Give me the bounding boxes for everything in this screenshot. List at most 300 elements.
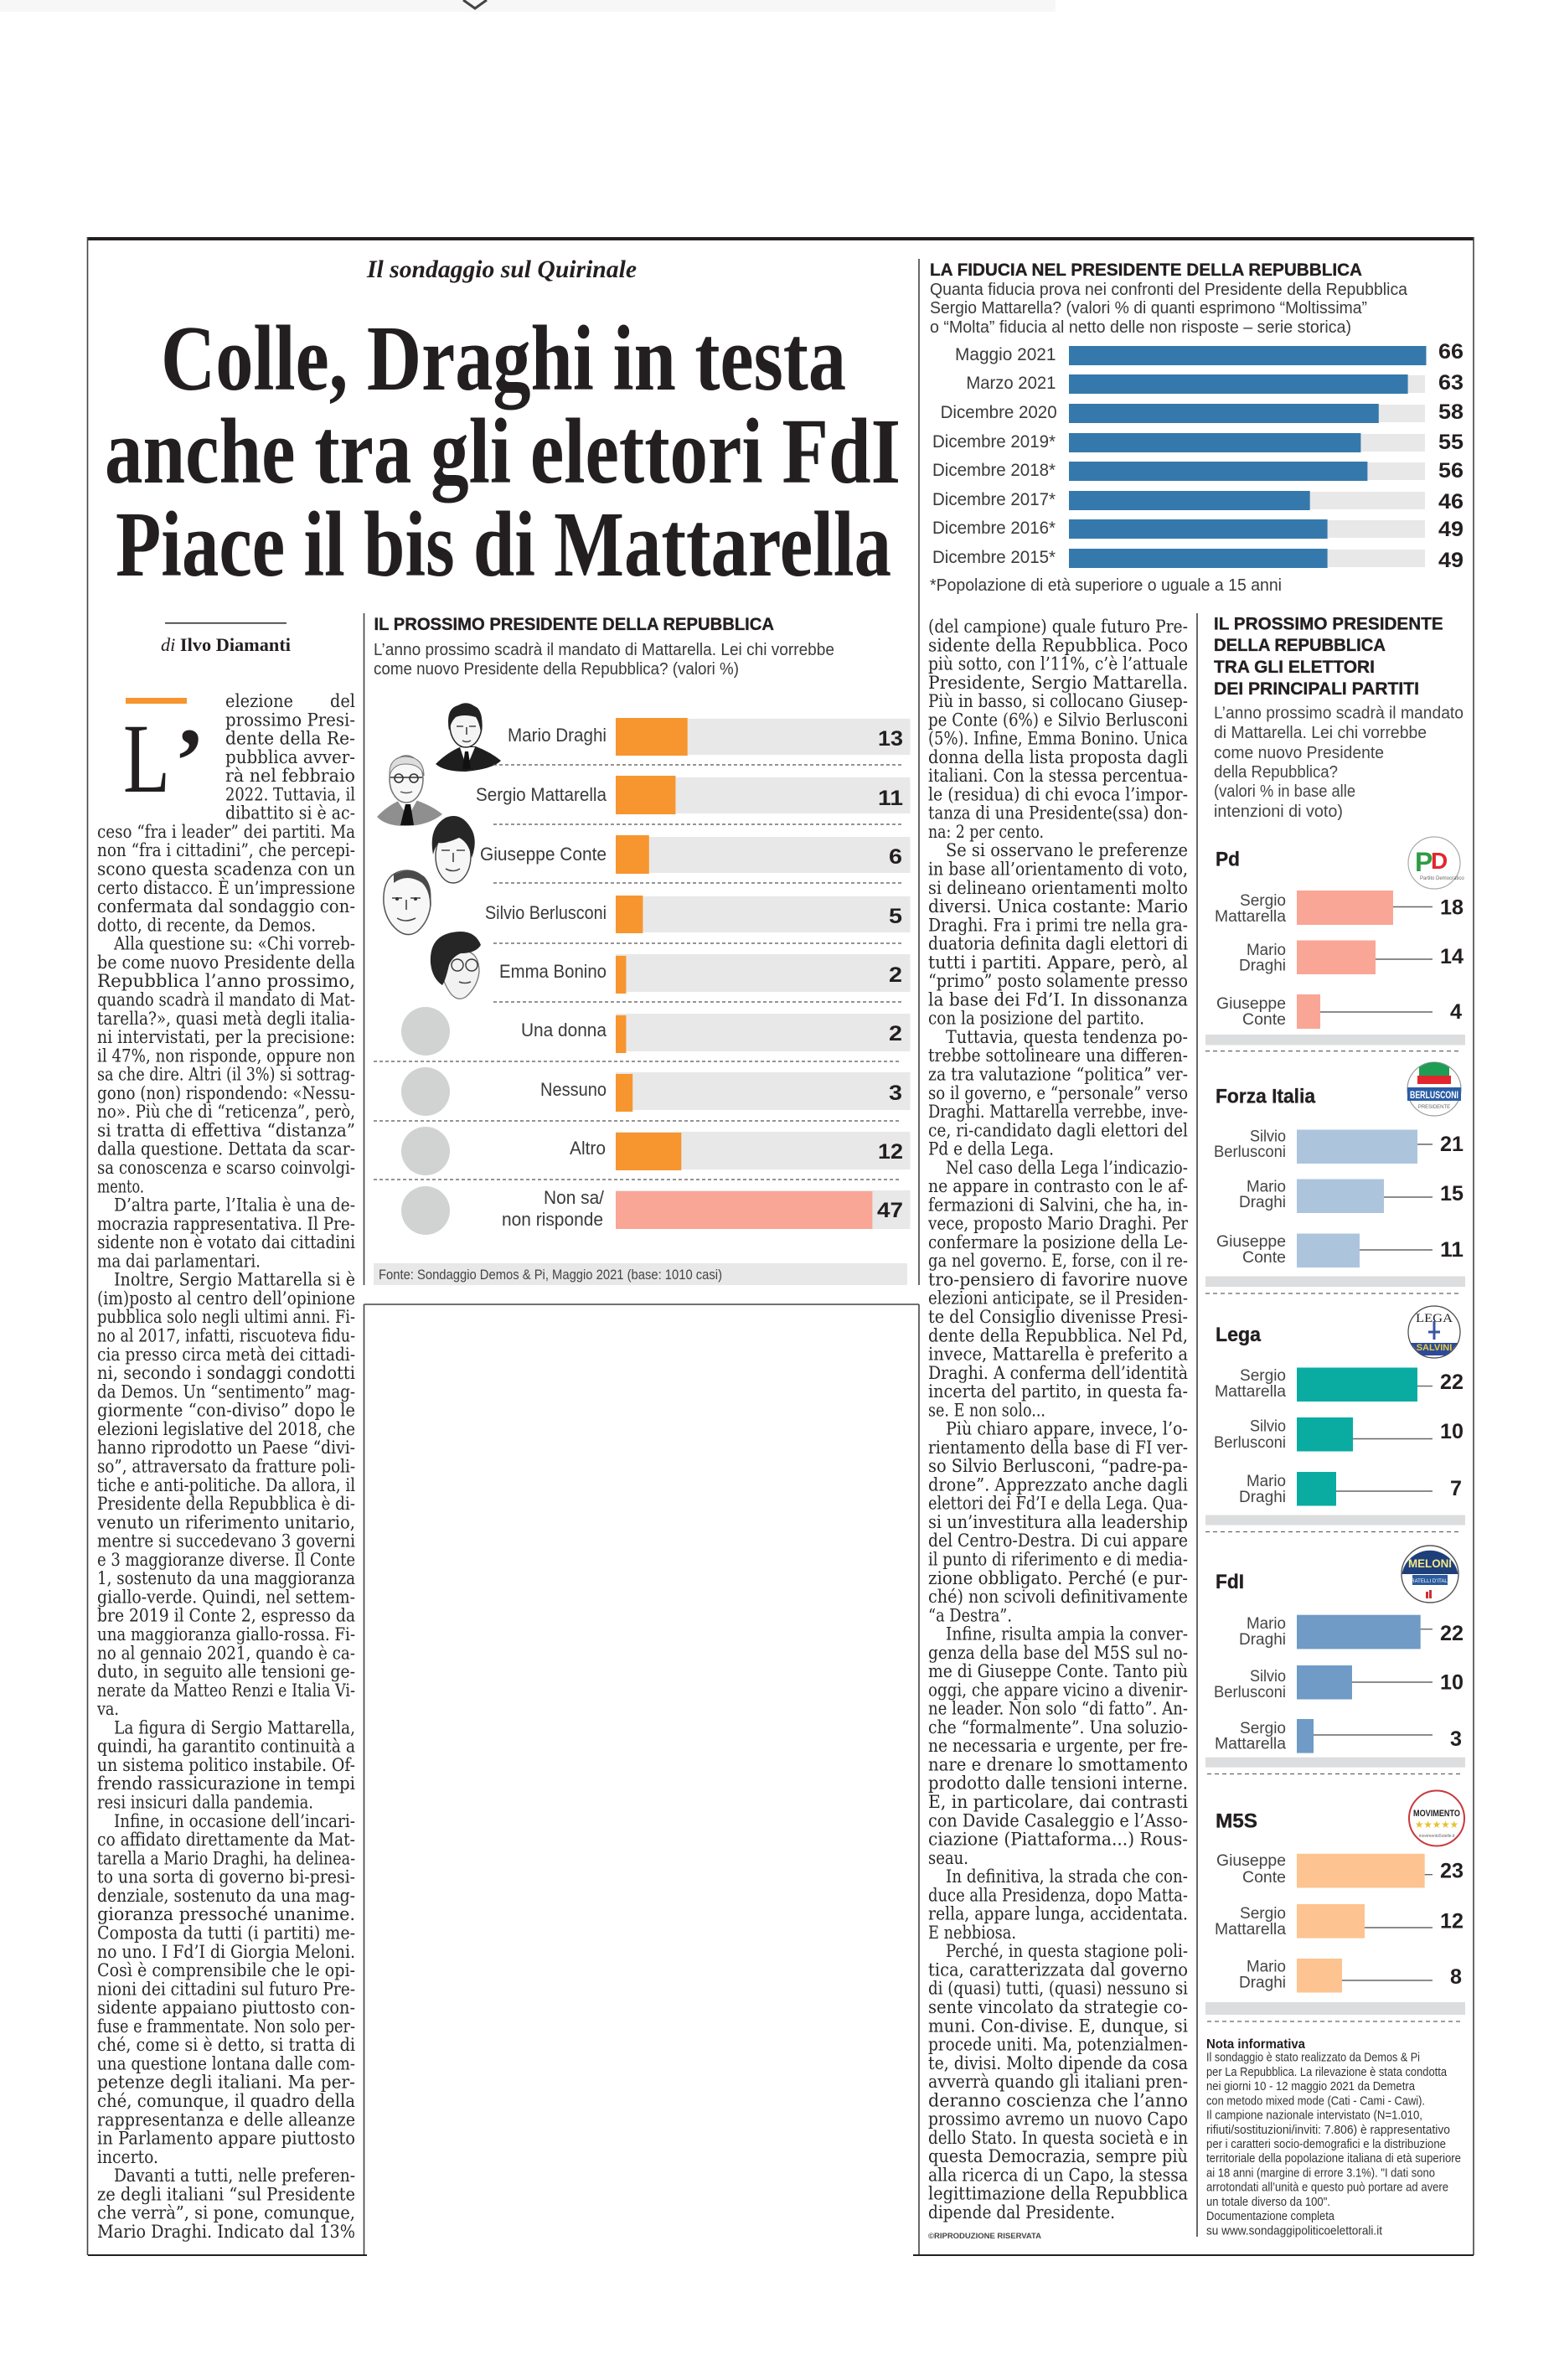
- section: Pd: 18: [1440, 896, 1463, 920]
- article text: column 2: tutti i partiti. Appare, però, al: [928, 953, 1188, 973]
- article text: column 2: più sotto, con l’11%, c’è l’attuale: [928, 653, 1188, 675]
- article text: column 1: (im)posto al centro dell’opinione: [97, 1288, 355, 1309]
- article text: column 1: quando scadrà il mandato di Mat-: [97, 990, 355, 1010]
- icon: logo FdI: FRATELLI D’ITALIA: [1408, 1579, 1452, 1584]
- nota informativa: Nota informativa: [1206, 2037, 1305, 2052]
- bar chart: fiducia: 63: [1438, 371, 1463, 395]
- nota informativa: Il sondaggio è stato realizzato da Demos & Pi: [1206, 2051, 1420, 2065]
- drop cap: ’: [174, 710, 205, 812]
- section: Lega: 7: [1450, 1477, 1462, 1500]
- section: Forza Italia: Giuseppe: [1216, 1233, 1286, 1251]
- section: Forza Italia: 11: [1440, 1238, 1463, 1262]
- article text: column 2: pe Conte (6%) e Silvio Berlusconi: [928, 710, 1188, 731]
- article text: column 1: petenze degli italiani. Ma per-: [97, 2073, 355, 2093]
- bar chart: fiducia: Dicembre 2018*: [932, 461, 1056, 480]
- article text: column 1: no al 2017, infatti, riscuoteva fidu-: [97, 1325, 355, 1347]
- bar chart: fiducia: Dicembre 2016*: [932, 519, 1056, 538]
- article text: column 1: Repubblica l’anno prossimo,: [97, 971, 355, 992]
- bar chart: candidati: 12: [878, 1140, 903, 1164]
- article text: column 1: Infine, in occasione dell’incari-: [114, 1811, 355, 1832]
- article text: column 2: drone”. Apprezzato anche dagli: [928, 1474, 1188, 1495]
- article text: column 2: prossimo avremo un nuovo Capo: [928, 2109, 1188, 2130]
- article text: column 1: e 3 maggioranze diverse. Il Conte: [97, 1550, 355, 1571]
- article text: column 2: rientamento della base di FI ver-: [928, 1438, 1188, 1458]
- article text: column 1: ché, comunque, il quadro della: [97, 2091, 355, 2112]
- article text: column 1: frendo rassicurazione in tempi: [97, 1773, 355, 1794]
- article text: column 1: mocrazia rappresentativa. Il Pre-: [97, 1214, 355, 1235]
- article text: column 2: sente vincolato da strategie co-: [928, 1997, 1188, 2018]
- section: Forza Italia: Silvio: [1250, 1128, 1286, 1146]
- article text: column 1: mentre si succedevano 3 governi: [97, 1531, 355, 1552]
- bar chart: fiducia: Dicembre 2019*: [932, 432, 1056, 452]
- bar chart: fiducia: Dicembre 2015*: [932, 548, 1056, 567]
- article text: column 2: “a Destra”.: [928, 1605, 1012, 1626]
- nota informativa: [1206, 2037, 1461, 2238]
- article text: column 1: rappresentanza e delle alleanze: [97, 2109, 355, 2130]
- article text: column 2: se. E non solo...: [928, 1400, 1045, 1421]
- article text: column 2: il punto di riferimento e di media-: [928, 1550, 1188, 1570]
- bar chart: fiducia: Dicembre 2017*: [932, 490, 1056, 509]
- section: FdI: Mattarella: [1215, 1736, 1286, 1753]
- heading: LA FIDUCIA NEL PRESIDENTE DELLA REPUBBLICA: [930, 261, 1362, 280]
- article text: column 2: ne necessaria e urgente, per fre-: [928, 1736, 1188, 1757]
- article text: column 2: fermazioni di Salvini, che ha, in-: [928, 1195, 1188, 1216]
- article text: column 1: no». Più che di “reticenza”, però,: [97, 1102, 355, 1123]
- bar chart: candidati: Nessuno: [540, 1079, 607, 1100]
- icon: logo M5S: ★★★★★: [1415, 1819, 1458, 1830]
- article text: column 2: questa Democrazia, sempre più: [928, 2146, 1188, 2167]
- article text: column 1: elezione: [225, 691, 293, 712]
- section: Pd: Sergio: [1240, 892, 1286, 910]
- nota informativa: su www.sondaggipoliticoelettorali.it: [1206, 2223, 1383, 2238]
- icon: logo Pd: P: [1415, 847, 1433, 877]
- section: Forza Italia: [1205, 1062, 1465, 1287]
- subtitle: di Mattarella. Lei chi vorrebbe: [1214, 724, 1427, 742]
- article text: column 1: elezioni legislative del 2018, che: [97, 1419, 355, 1440]
- panel: prossimo presidente: [374, 615, 910, 1285]
- bar chart: fiducia: 46: [1438, 490, 1463, 514]
- article text: column 1: mento.: [97, 1176, 144, 1197]
- section: Lega: 22: [1440, 1371, 1463, 1394]
- section: Pd: Giuseppe: [1216, 995, 1286, 1013]
- article text: column 1: il 47%, non risponde, oppure non: [97, 1045, 355, 1066]
- article text: column 2: legittimazione della Repubblica: [928, 2184, 1188, 2205]
- article text: column 1: che verrà”, si pone, comunque,: [97, 2203, 355, 2224]
- article text: column 1: dalla questione. Dettata da scar-: [97, 1139, 355, 1160]
- article text: column 2: (del campione) quale futuro Pre-: [928, 617, 1188, 638]
- article text: column 2: Presidente, Sergio Mattarella.: [928, 673, 1188, 694]
- article text: column 2: Se si osservano le preferenze: [946, 840, 1188, 861]
- section: Lega: Sergio: [1240, 1367, 1286, 1385]
- icon: placeholder circles: [401, 1007, 450, 1235]
- bar chart: candidati: 2: [889, 1022, 902, 1045]
- article text: column 1: venuto un riferimento unitario,: [96, 1512, 355, 1533]
- article text: column 2: (5%). Infine, Emma Bonino. Unica: [928, 729, 1188, 750]
- article text: column 2: rella, appare lunga, accidentata.: [928, 1904, 1188, 1925]
- article text: column 2: za tra valutazione “politica” ver-: [928, 1064, 1188, 1086]
- nota informativa: Documentazione completa: [1206, 2209, 1335, 2223]
- article text: column 1: to una sorta di governo bi-presi-: [97, 1867, 355, 1888]
- article text: column 2: Draghi. Fra i primi tre nella gra-: [928, 915, 1188, 936]
- article text: column 2: trebbe sottolineare una differen-: [928, 1045, 1188, 1066]
- article text: column 2: dente della Repubblica. Nel Pd,: [928, 1325, 1188, 1346]
- article text: column 1: duto, in seguito alle tensioni ge-: [97, 1662, 355, 1683]
- icon: logo Lega: SALVINI: [1417, 1343, 1452, 1353]
- article text: column 2: zione obbligato. Perché (e pur-: [928, 1568, 1188, 1589]
- bar chart: fiducia: 49: [1438, 518, 1463, 541]
- bar chart: fiducia: Marzo 2021: [966, 374, 1056, 393]
- section: FdI: Draghi: [1239, 1631, 1286, 1649]
- article text: column 2: ne leader. Non solo “di fatto”. An-: [928, 1699, 1188, 1720]
- heading: DELLA REPUBBLICA: [1214, 636, 1386, 655]
- section: M5S: M5S: [1216, 1810, 1257, 1833]
- copyright note: ©RIPRODUZIONE RISERVATA: [928, 2232, 1042, 2240]
- section: Lega: 10: [1440, 1420, 1463, 1443]
- article text: column 1: giormente “con-diviso” dopo le: [97, 1401, 355, 1422]
- article text: column 1: quindi, ha garantito continuità a: [97, 1737, 355, 1758]
- article text: column 1: ceso “fra i leader” dei partiti. Ma: [97, 822, 355, 843]
- article text: column 2: ché) non scivoli definitivamente: [928, 1587, 1188, 1608]
- article text: column 1: si tratta di effettiva “distanza”: [97, 1120, 355, 1141]
- article text: column 2: Draghi. Mattarella verrebbe, inve-: [928, 1102, 1188, 1123]
- article text: column 2: Tuttavia, questa tendenza po-: [946, 1027, 1188, 1048]
- article text: column 1: un sistema politico instabile. Of-: [97, 1755, 355, 1776]
- nota informativa: Il campione nazionale intervistato (N=1.010,: [1206, 2109, 1422, 2123]
- article text: column 1: del: [330, 691, 355, 712]
- article text: column 1: prossimo Presi-: [225, 710, 355, 731]
- article text: column 2: ciazione (Piattaforma...) Rous-: [928, 1830, 1188, 1851]
- article text: column 2: confermare la posizione della Le-: [928, 1232, 1188, 1253]
- section: Forza Italia: Conte: [1242, 1249, 1286, 1267]
- bar chart: fiducia: 49: [1438, 549, 1463, 572]
- bar chart: candidati: 2: [889, 963, 902, 987]
- icon: logo Forza Italia: [1407, 1062, 1461, 1116]
- section: Forza Italia: Berlusconi: [1214, 1144, 1286, 1161]
- nota informativa: rifiuti/sostituzioni/inviti: 7.806) è rappresentativo: [1206, 2123, 1450, 2137]
- bar chart: candidati: Emma Bonino: [499, 961, 607, 982]
- nota informativa: ai 18 anni (margine di errore 3.1%). "I dati sono: [1206, 2166, 1435, 2180]
- subtitle: della Repubblica?: [1214, 763, 1338, 782]
- icon: logo Lega: LEGA: [1416, 1312, 1453, 1325]
- article text: column 2: la base dei Fd’I. In dissonanza: [928, 989, 1188, 1010]
- article text: column 2: di (quasi) tutti, (quasi) nessuno si: [928, 1979, 1188, 2000]
- section: Forza Italia: 15: [1440, 1182, 1463, 1205]
- article text: column 1: Presidente della Repubblica è di-: [97, 1494, 355, 1515]
- article text: column 1: hanno riprodotto un Paese “divi-: [97, 1438, 355, 1458]
- article text: column 1: sa conoscenza e scarso coinvolgi-: [97, 1158, 355, 1179]
- section: Pd: 14: [1440, 945, 1463, 968]
- article text: column 1: resi insicuri dalla pandemia.: [97, 1793, 313, 1813]
- article text: column 1: confermata dal sondaggio con-: [97, 896, 355, 917]
- article text: column 1: cia presso circa metà dei cittadi-: [97, 1345, 355, 1366]
- article text: column 1: pubblica avver-: [225, 747, 355, 768]
- article text: column 2: Draghi. A conferma dell’identità: [928, 1363, 1188, 1384]
- article text: column 2: genza della base del M5S sul no-: [928, 1643, 1188, 1664]
- page frame: [87, 237, 1474, 2255]
- article text: column 2: prodotto dalle tensioni interne.: [928, 1773, 1188, 1794]
- article text: column 1: Davanti a tutti, nelle preferen-: [114, 2166, 355, 2186]
- article text: column 1: pubblica solo negli ultimi anni. Fi-: [97, 1307, 355, 1328]
- article text: column 2: elettori dei Fd’I e della Lega. Qua-: [928, 1494, 1188, 1515]
- article text: column 2: Più in basso, si collocano Giusep-: [928, 691, 1188, 712]
- article text: column 2: dello Stato. In questa società e in: [928, 2128, 1188, 2149]
- article text: column 1: gono (non) rispondendo: «Nessu-: [97, 1083, 355, 1104]
- article text: column 1: 2022. Tuttavia, il: [225, 784, 355, 805]
- bar chart: candidati: Non sa/: [544, 1187, 605, 1208]
- article text: column 2: [927, 617, 1189, 2223]
- bar chart: fiducia: 55: [1438, 431, 1463, 454]
- source bar: Fonte: Sondaggio Demos & Pi, Maggio 2021 (base: 1010 casi): [379, 1267, 722, 1283]
- section: M5S: Sergio: [1240, 1905, 1286, 1923]
- bar chart: fiducia: Dicembre 2020: [941, 403, 1057, 422]
- article text: column 2: seau.: [928, 1848, 968, 1869]
- headline: [105, 307, 901, 596]
- heading: IL PROSSIMO PRESIDENTE DELLA REPUBBLICA: [374, 615, 774, 634]
- article text: column 2: dipende dal Presidente.: [928, 2202, 1115, 2223]
- article text: column 2: tica, caratterizzata dal governo: [928, 1959, 1188, 1980]
- section: FdI: 3: [1450, 1727, 1462, 1751]
- article text: column 2: E, in particolare, dai contrasti: [928, 1792, 1188, 1813]
- section: M5S: Draghi: [1239, 1975, 1286, 1992]
- article text: column 2: invece, Mattarella è preferito a: [928, 1344, 1188, 1366]
- article text: column 2: Pd e della Lega.: [928, 1139, 1054, 1160]
- bar chart: candidati: Sergio Mattarella: [476, 784, 607, 805]
- bar chart: candidati: 5: [889, 905, 902, 928]
- article text: column 2: Nel caso della Lega l’indicazio-: [946, 1158, 1188, 1179]
- article text: column 1: va.: [96, 1699, 119, 1720]
- subtitle: (valori % in base alle: [1214, 782, 1355, 801]
- section: Pd: 4: [1450, 1000, 1462, 1024]
- article text: column 1: [96, 691, 355, 2243]
- icon: portrait Giuseppe Conte: [432, 816, 475, 883]
- section: Lega: Lega: [1216, 1324, 1262, 1346]
- section: Forza Italia: Forza Italia: [1216, 1086, 1316, 1107]
- article text: column 1: tarella?», quasi metà degli italia-: [97, 1009, 355, 1030]
- article text: column 2: del Centro-Destra. Di cui appare: [928, 1531, 1188, 1551]
- nota informativa: un totale diverso da 100".: [1206, 2195, 1330, 2209]
- article text: column 2: “primo” posto solamente presso: [928, 971, 1188, 992]
- article text: column 1: una questione lontana dalle com-: [97, 2053, 355, 2074]
- icon: logo Forza Italia: BERLUSCONI: [1410, 1089, 1458, 1101]
- byline: di Ilvo Diamanti: [161, 634, 291, 655]
- section: M5S: [1205, 1791, 1465, 2015]
- icon: logo FdI: [1402, 1546, 1458, 1603]
- article text: column 1: so”, attraversato da fratture poli-: [97, 1456, 355, 1478]
- icon: logo Pd: D: [1431, 848, 1448, 874]
- article text: column 1: ma dai parlamentari.: [97, 1251, 261, 1272]
- icon: logo Lega: [1408, 1306, 1460, 1358]
- section: Lega: Silvio: [1250, 1417, 1286, 1436]
- article text: column 1: tiche e anti-politiche. Da allora, il: [97, 1475, 355, 1496]
- bar chart: candidati: 3: [889, 1082, 902, 1105]
- article text: column 1: Mario Draghi. Indicato dal 13%: [97, 2222, 355, 2243]
- section: FdI: Sergio: [1240, 1720, 1286, 1737]
- article text: column 2: so Silvio Berlusconi, “padre-pa-: [928, 1456, 1188, 1477]
- section: M5S: Giuseppe: [1216, 1852, 1286, 1870]
- article text: column 2: in base all’orientamento di voto,: [928, 860, 1188, 880]
- article text: column 2: E nebbiosa.: [928, 1923, 1016, 1944]
- icon: portrait Silvio Berlusconi: [384, 870, 431, 935]
- icon: logo M5S: movimento5stelle.it: [1419, 1834, 1455, 1839]
- section: M5S: Mario: [1247, 1959, 1286, 1976]
- bar chart: fiducia: Maggio 2021: [955, 345, 1056, 364]
- subtitle: L’anno prossimo scadrà il mandato di Mattarella. Lei chi vorrebbe: [374, 641, 834, 659]
- article text: column 1: Inoltre, Sergio Mattarella si è: [114, 1270, 355, 1291]
- icon: portrait Sergio Mattarella: [377, 756, 442, 826]
- bar chart: candidati: 6: [889, 845, 902, 869]
- article text: column 1: co affidato direttamente da Mat-: [97, 1830, 355, 1851]
- bar chart: candidati: Mario Draghi: [508, 725, 607, 746]
- nota informativa: per La Repubblica. La rilevazione è stata condotta: [1206, 2065, 1448, 2079]
- article text: column 1: D’altra parte, l’Italia è una de-: [114, 1195, 355, 1216]
- article text: column 2: nare e drenare lo smottamento: [928, 1754, 1188, 1776]
- article text: column 2: elezioni anticipate, se il Presiden-: [928, 1288, 1188, 1309]
- article text: column 2: me di Giuseppe Conte. Tanto più: [928, 1661, 1188, 1682]
- article text: column 2: che “formalmente”. Una soluzio-: [928, 1717, 1188, 1738]
- article text: column 1: be come nuovo Presidente della: [97, 953, 355, 973]
- icon: portrait Mario Draghi: [436, 704, 501, 772]
- headline: Colle, Draghi in testa: [161, 307, 846, 410]
- section: FdI: Mario: [1247, 1615, 1286, 1633]
- article text: column 2: duce alla Presidenza, dopo Matta-: [928, 1885, 1188, 1906]
- article text: column 2: te, divisi. Molto dipende da cosa: [928, 2053, 1188, 2074]
- article text: column 2: ne appare in contrasto con le af-: [928, 1176, 1188, 1197]
- icon: logo Pd: [1408, 837, 1464, 889]
- section: Pd: [1205, 837, 1465, 1045]
- article text: column 1: sidente non è votato dai cittadini: [97, 1232, 355, 1253]
- article text: column 2: In definitiva, la strada che con-: [946, 1866, 1188, 1887]
- section: FdI: FdI: [1216, 1571, 1244, 1593]
- section: Lega: Draghi: [1239, 1489, 1286, 1506]
- section: Lega: Mario: [1247, 1473, 1286, 1490]
- section: Pd: Mattarella: [1215, 908, 1286, 926]
- article text: column 1: da Demos. Un “sentimento” mag-: [97, 1381, 355, 1402]
- bar chart: candidati: 47: [877, 1199, 903, 1222]
- article text: column 2: con Davide Casaleggio e l’Asso-: [928, 1810, 1188, 1831]
- article text: column 1: giallo-verde. Quindi, nel settem-: [97, 1587, 355, 1608]
- article text: column 2: Perché, in questa stagione poli-: [946, 1941, 1188, 1962]
- bar chart: fiducia: 58: [1438, 400, 1463, 424]
- article text: column 2: con la posizione del partito.: [928, 1009, 1144, 1030]
- bar chart: fiducia: 56: [1438, 459, 1463, 483]
- article text: column 1: ze degli italiani “sul Presidente: [97, 2184, 355, 2205]
- kicker: Il sondaggio sul Quirinale: [366, 256, 637, 283]
- icon: logo M5S: [1409, 1791, 1464, 1846]
- subtitle: [1214, 704, 1463, 821]
- subtitle: o “Molta” fiducia al netto delle non risposte – serie storica): [930, 318, 1351, 337]
- heading: TRA GLI ELETTORI: [1214, 658, 1375, 677]
- article text: column 1: bre 2019 il Conte 2, espresso da: [97, 1606, 355, 1627]
- panel: fiducia nel presidente: [930, 261, 1463, 595]
- article text: column 2: si un’investitura alla leadership: [928, 1512, 1188, 1533]
- top browser strip: [0, 0, 1056, 12]
- subtitle: come nuovo Presidente: [1214, 744, 1384, 762]
- article text: column 1: sidente appaiano piuttosto con-: [97, 1998, 355, 2019]
- section: Pd: Draghi: [1239, 957, 1286, 975]
- section: M5S: 8: [1450, 1965, 1462, 1989]
- article text: column 2: procede uniti. Ma, potenzialmen-: [928, 2034, 1188, 2056]
- icon: portrait Emma Bonino: [431, 932, 481, 999]
- bar chart: candidati: [476, 718, 910, 1230]
- bar chart: candidati: 13: [878, 727, 903, 751]
- section: Lega: Berlusconi: [1214, 1434, 1286, 1452]
- nota informativa: territoriale della popolazione italiana di età superiore: [1206, 2151, 1461, 2166]
- article text: column 1: rà nel febbraio: [225, 766, 355, 787]
- section: FdI: Berlusconi: [1214, 1684, 1286, 1701]
- section: M5S: 12: [1440, 1909, 1463, 1933]
- section: Forza Italia: Mario: [1247, 1178, 1286, 1196]
- article text: column 1: incerto.: [97, 2147, 158, 2168]
- article text: column 2: sidente della Repubblica. Poco: [928, 635, 1188, 656]
- article text: column 2: vece, proposto Mario Draghi. Per: [927, 1214, 1189, 1235]
- article text: column 1: Composta da tutti (i partiti) me-: [97, 1923, 355, 1944]
- section: Lega: [1205, 1306, 1465, 1525]
- article text: column 2: ce, ri-candidato dagli elettori del: [928, 1120, 1188, 1141]
- article text: column 1: Così è comprensibile che le opi-: [97, 1960, 355, 1981]
- article text: column 1: no uno. I Fd’I di Giorgia Meloni.: [97, 1942, 355, 1963]
- article text: column 1: non “fra i cittadini”, che percepi-: [97, 840, 355, 861]
- article text: column 1: La figura di Sergio Mattarella,: [114, 1717, 355, 1738]
- section: M5S: Conte: [1242, 1869, 1286, 1887]
- bar chart: candidati: Una donna: [521, 1020, 607, 1040]
- article text: column 1: nioni dei cittadini sul futuro Pre-: [97, 1979, 355, 2000]
- icon: logo Forza Italia: PRESIDENTE: [1418, 1105, 1450, 1110]
- section: Forza Italia: 21: [1440, 1133, 1463, 1156]
- nota informativa: nei giorni 10 - 12 maggio 2021 da Demetra: [1206, 2079, 1416, 2093]
- article text: column 1: fuse e frammentate. Non solo per-: [97, 2016, 355, 2037]
- article text: column 2: muni. Con-divise. E, dunque, si: [928, 2016, 1188, 2037]
- article text: column 2: duatoria definita dagli elettori di: [928, 934, 1188, 955]
- article text: column 2: ga nel governo. E, forse, con il re-: [928, 1251, 1188, 1272]
- article text: column 1: scono questa scadenza con un: [97, 860, 355, 880]
- bar chart: candidati: non risponde: [502, 1209, 603, 1230]
- subtitle: intenzioni di voto): [1214, 803, 1343, 821]
- article text: column 1: dotto, di recente, da Demos.: [97, 915, 316, 936]
- article text: column 2: alla ricerca di un Capo, la stessa: [928, 2165, 1188, 2186]
- article text: column 2: donna della lista proposta dagli: [928, 747, 1188, 768]
- article text: column 1: Alla questione su: «Chi vorreb-: [113, 934, 355, 955]
- headline: Piace il bis di Mattarella: [116, 493, 891, 596]
- bar chart: candidati: 11: [878, 787, 903, 810]
- subtitle: Quanta fiducia prova nei confronti del Presidente della Repubblica: [930, 281, 1408, 299]
- bar chart: candidati: Silvio Berlusconi: [485, 902, 607, 923]
- subtitle: Sergio Mattarella? (valori % di quanti esprimono “Moltissima”: [930, 299, 1367, 318]
- section: Pd: Mario: [1247, 942, 1286, 959]
- article text: column 1: 1, sostenuto da una maggioranza: [97, 1568, 355, 1589]
- article text: column 1: no al gennaio 2021, quando è ca-: [97, 1643, 355, 1664]
- article text: column 1: ni intervistati, per la precisione:: [97, 1027, 355, 1048]
- article text: column 1: una maggioranza giallo-rossa. Fi-: [97, 1624, 355, 1645]
- article text: column 1: gioranza pressoché unanime.: [97, 1904, 355, 1925]
- nota informativa: arrotondati all’unità e questo può portare ad avere: [1206, 2181, 1448, 2195]
- article text: column 1: sa che dire. Altri (il 3%) si sottrag-: [97, 1065, 355, 1086]
- section: Lega: Mattarella: [1215, 1383, 1286, 1401]
- panel: elettori dei partiti: [1205, 615, 1465, 2238]
- section: Forza Italia: Draghi: [1239, 1194, 1286, 1211]
- article text: column 1: dibattito si è ac-: [225, 803, 355, 824]
- heading: [1214, 615, 1443, 699]
- article text: column 1: certo distacco. È un’impressione: [97, 876, 355, 899]
- section: M5S: 23: [1440, 1860, 1463, 1883]
- section: M5S: Mattarella: [1215, 1921, 1286, 1939]
- section: FdI: Silvio: [1250, 1668, 1286, 1686]
- article text: column 2: avverrà quando gli italiani pren-: [928, 2072, 1188, 2093]
- footnote: *Popolazione di età superiore o uguale a 15 anni: [930, 576, 1282, 595]
- article text: column 2: italiani. Con la stessa percentua-: [928, 766, 1188, 787]
- article text: column 2: diversi. Unica costante: Mario: [928, 896, 1188, 917]
- article text: column 2: so il governo, e “personale” verso: [928, 1083, 1188, 1104]
- drop cap: L: [123, 704, 170, 813]
